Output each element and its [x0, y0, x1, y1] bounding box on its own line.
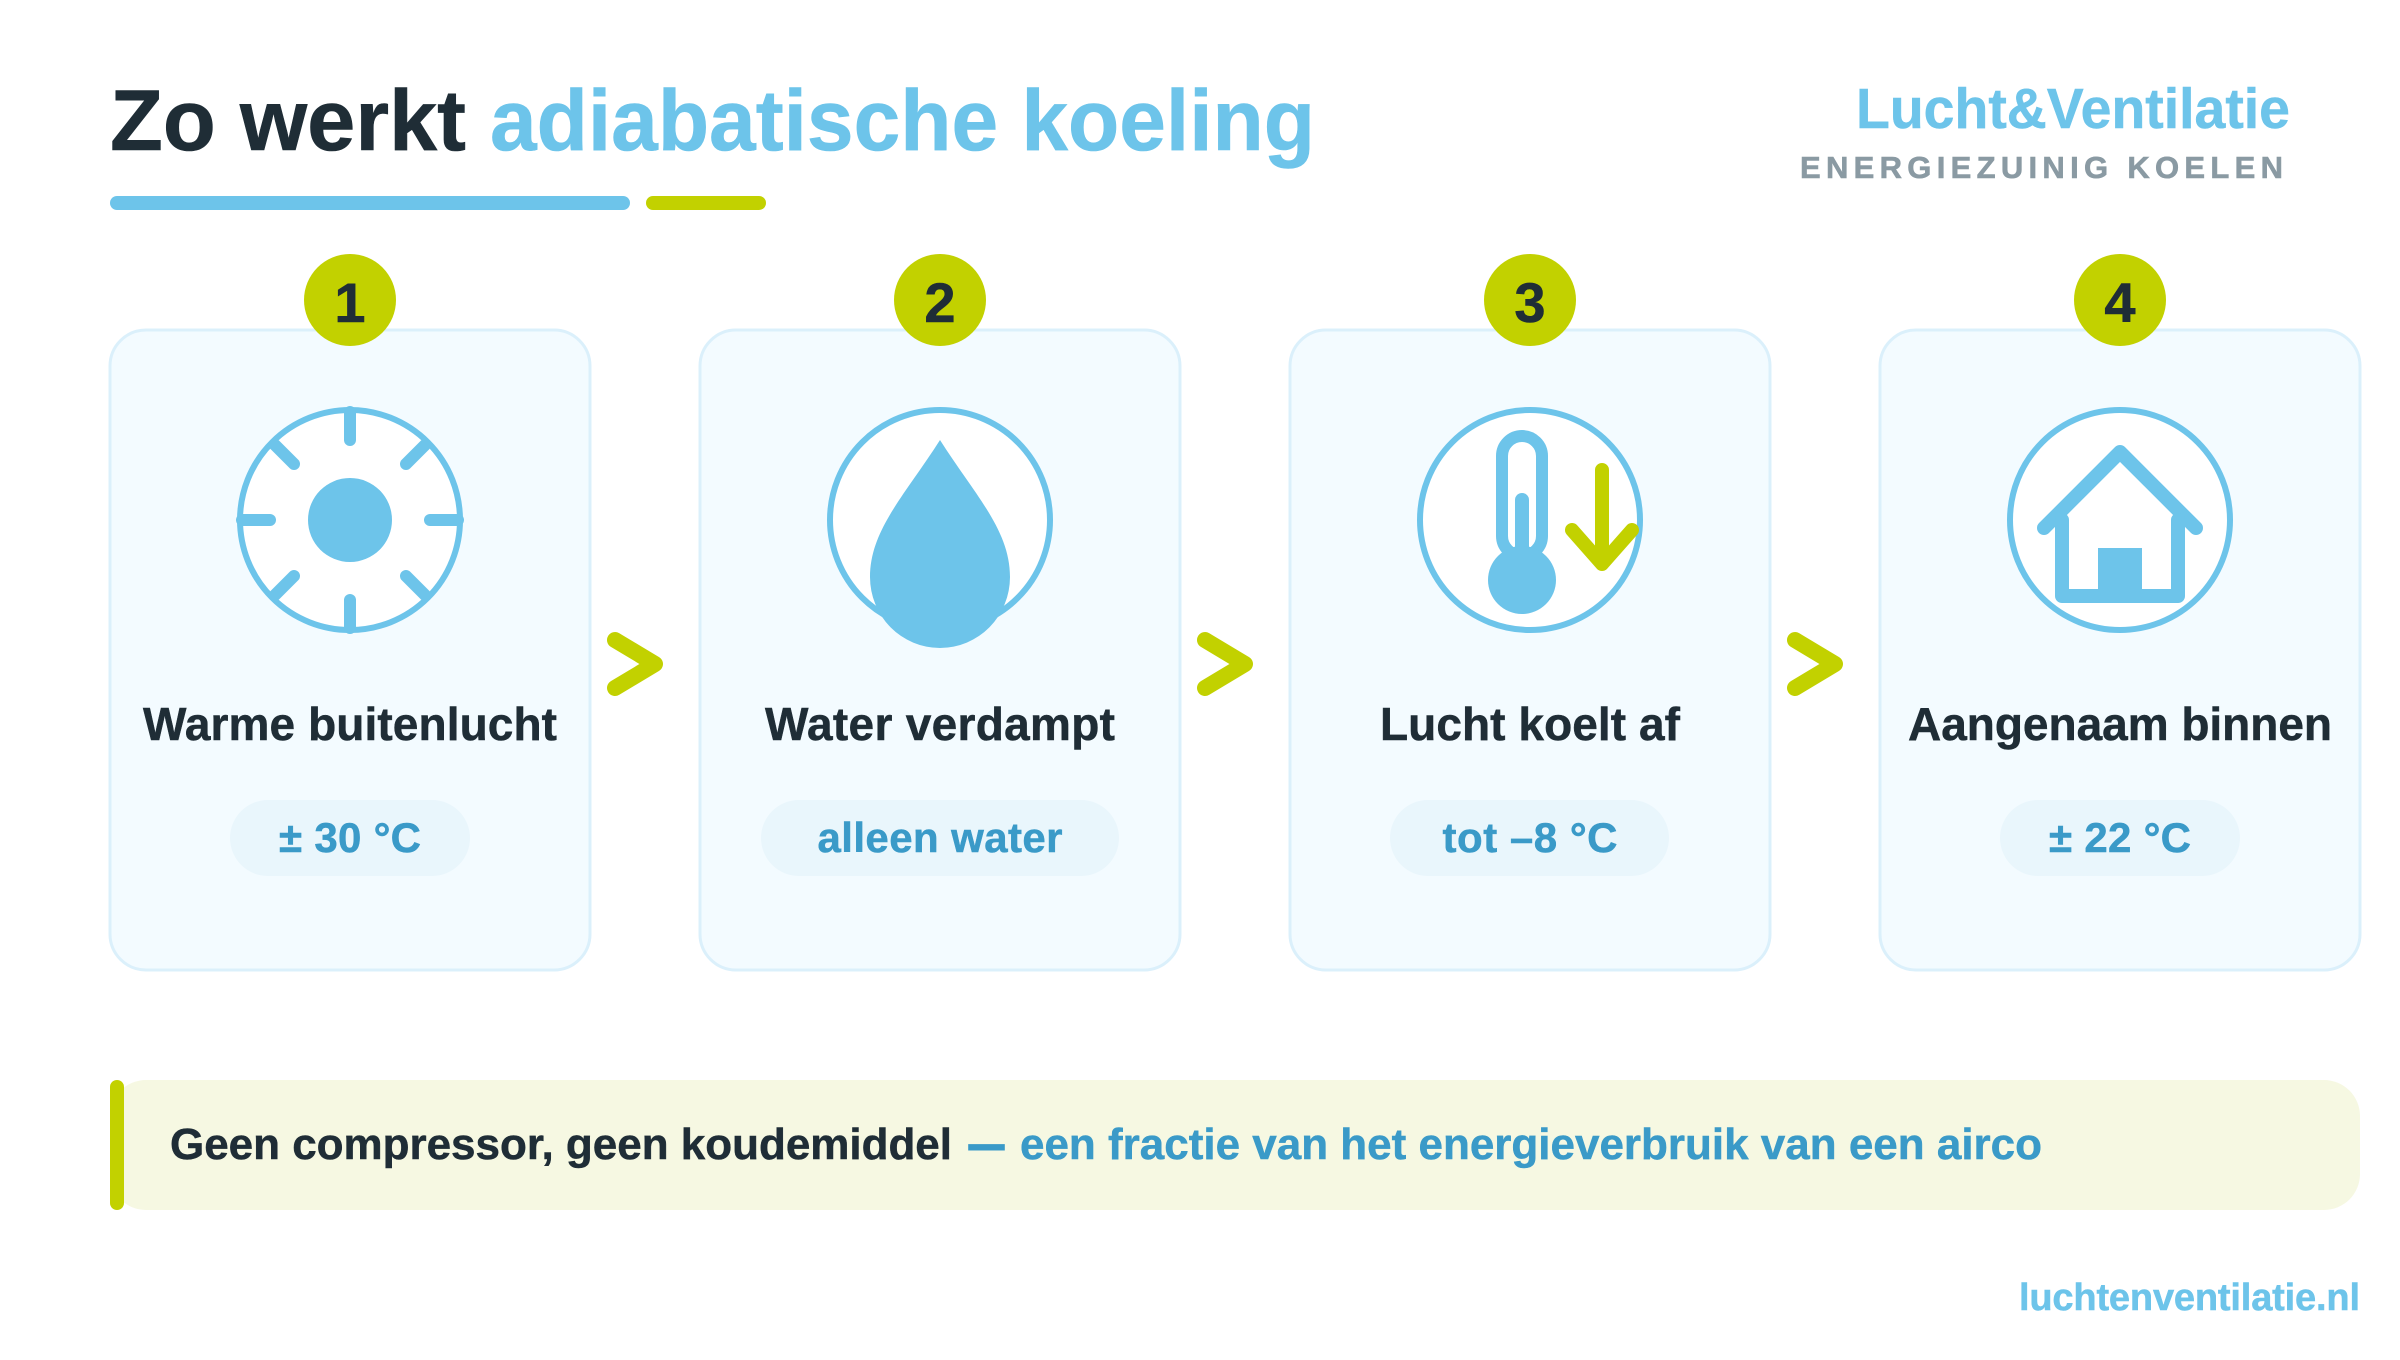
- step number badge 3: 3: [1514, 271, 1546, 334]
- panel: step 3 lucht koelt af: [1290, 254, 1770, 970]
- callout text: —: [969, 1120, 1004, 1169]
- value pill: [1390, 800, 1669, 876]
- panel: step 1 warme buitenlucht: [110, 254, 590, 970]
- step label: Lucht koelt af: [1380, 698, 1681, 750]
- callout text: [170, 1120, 2042, 1169]
- callout text: een fractie van het energieverbruik van een airco: [1020, 1120, 2042, 1169]
- icon: thermometer with down arrow: [1420, 410, 1640, 630]
- brand logo: ENERGIEZUINIG KOELEN: [1800, 150, 2283, 185]
- icon: water drop: [830, 410, 1050, 648]
- title underline: [110, 196, 766, 210]
- value pill: [761, 800, 1119, 876]
- step number badge 3: [1484, 254, 1576, 346]
- value pill: ± 22 °C: [2049, 814, 2191, 861]
- step label: Warme buitenlucht: [143, 698, 557, 750]
- icon: house: [2010, 410, 2230, 630]
- step number badge 4: 4: [2104, 271, 2136, 334]
- icon: sun: [240, 410, 460, 630]
- arrow 1 to 2: [615, 640, 655, 688]
- brand logo: Lucht&Ventilatie: [1856, 77, 2290, 141]
- step number badge 1: [304, 254, 396, 346]
- value pill: alleen water: [818, 814, 1062, 861]
- footer url: luchtenventilatie.nl: [2019, 1277, 2360, 1319]
- title: adiabatische koeling: [490, 73, 1315, 169]
- step number badge 1: 1: [334, 271, 366, 334]
- value pill: [230, 800, 470, 876]
- title: Zo werkt: [110, 73, 466, 169]
- step number badge 2: 2: [924, 271, 956, 334]
- callout bar: [110, 1080, 2360, 1210]
- brand logo: [1800, 77, 2290, 185]
- step label: Water verdampt: [765, 698, 1115, 750]
- value pill: tot –8 °C: [1442, 814, 1618, 861]
- panel: step 4 aangenaam binnen: [1880, 254, 2360, 970]
- callout text: Geen compressor, geen koudemiddel: [170, 1120, 952, 1169]
- step number badge 4: [2074, 254, 2166, 346]
- value pill: ± 30 °C: [279, 814, 421, 861]
- arrow 2 to 3: [1205, 640, 1245, 688]
- panel: step 2 water verdampt: [700, 254, 1180, 970]
- arrow 3 to 4: [1795, 640, 1835, 688]
- title: [110, 73, 1315, 169]
- value pill: [2000, 800, 2240, 876]
- step label: Aangenaam binnen: [1908, 698, 2332, 750]
- step number badge 2: [894, 254, 986, 346]
